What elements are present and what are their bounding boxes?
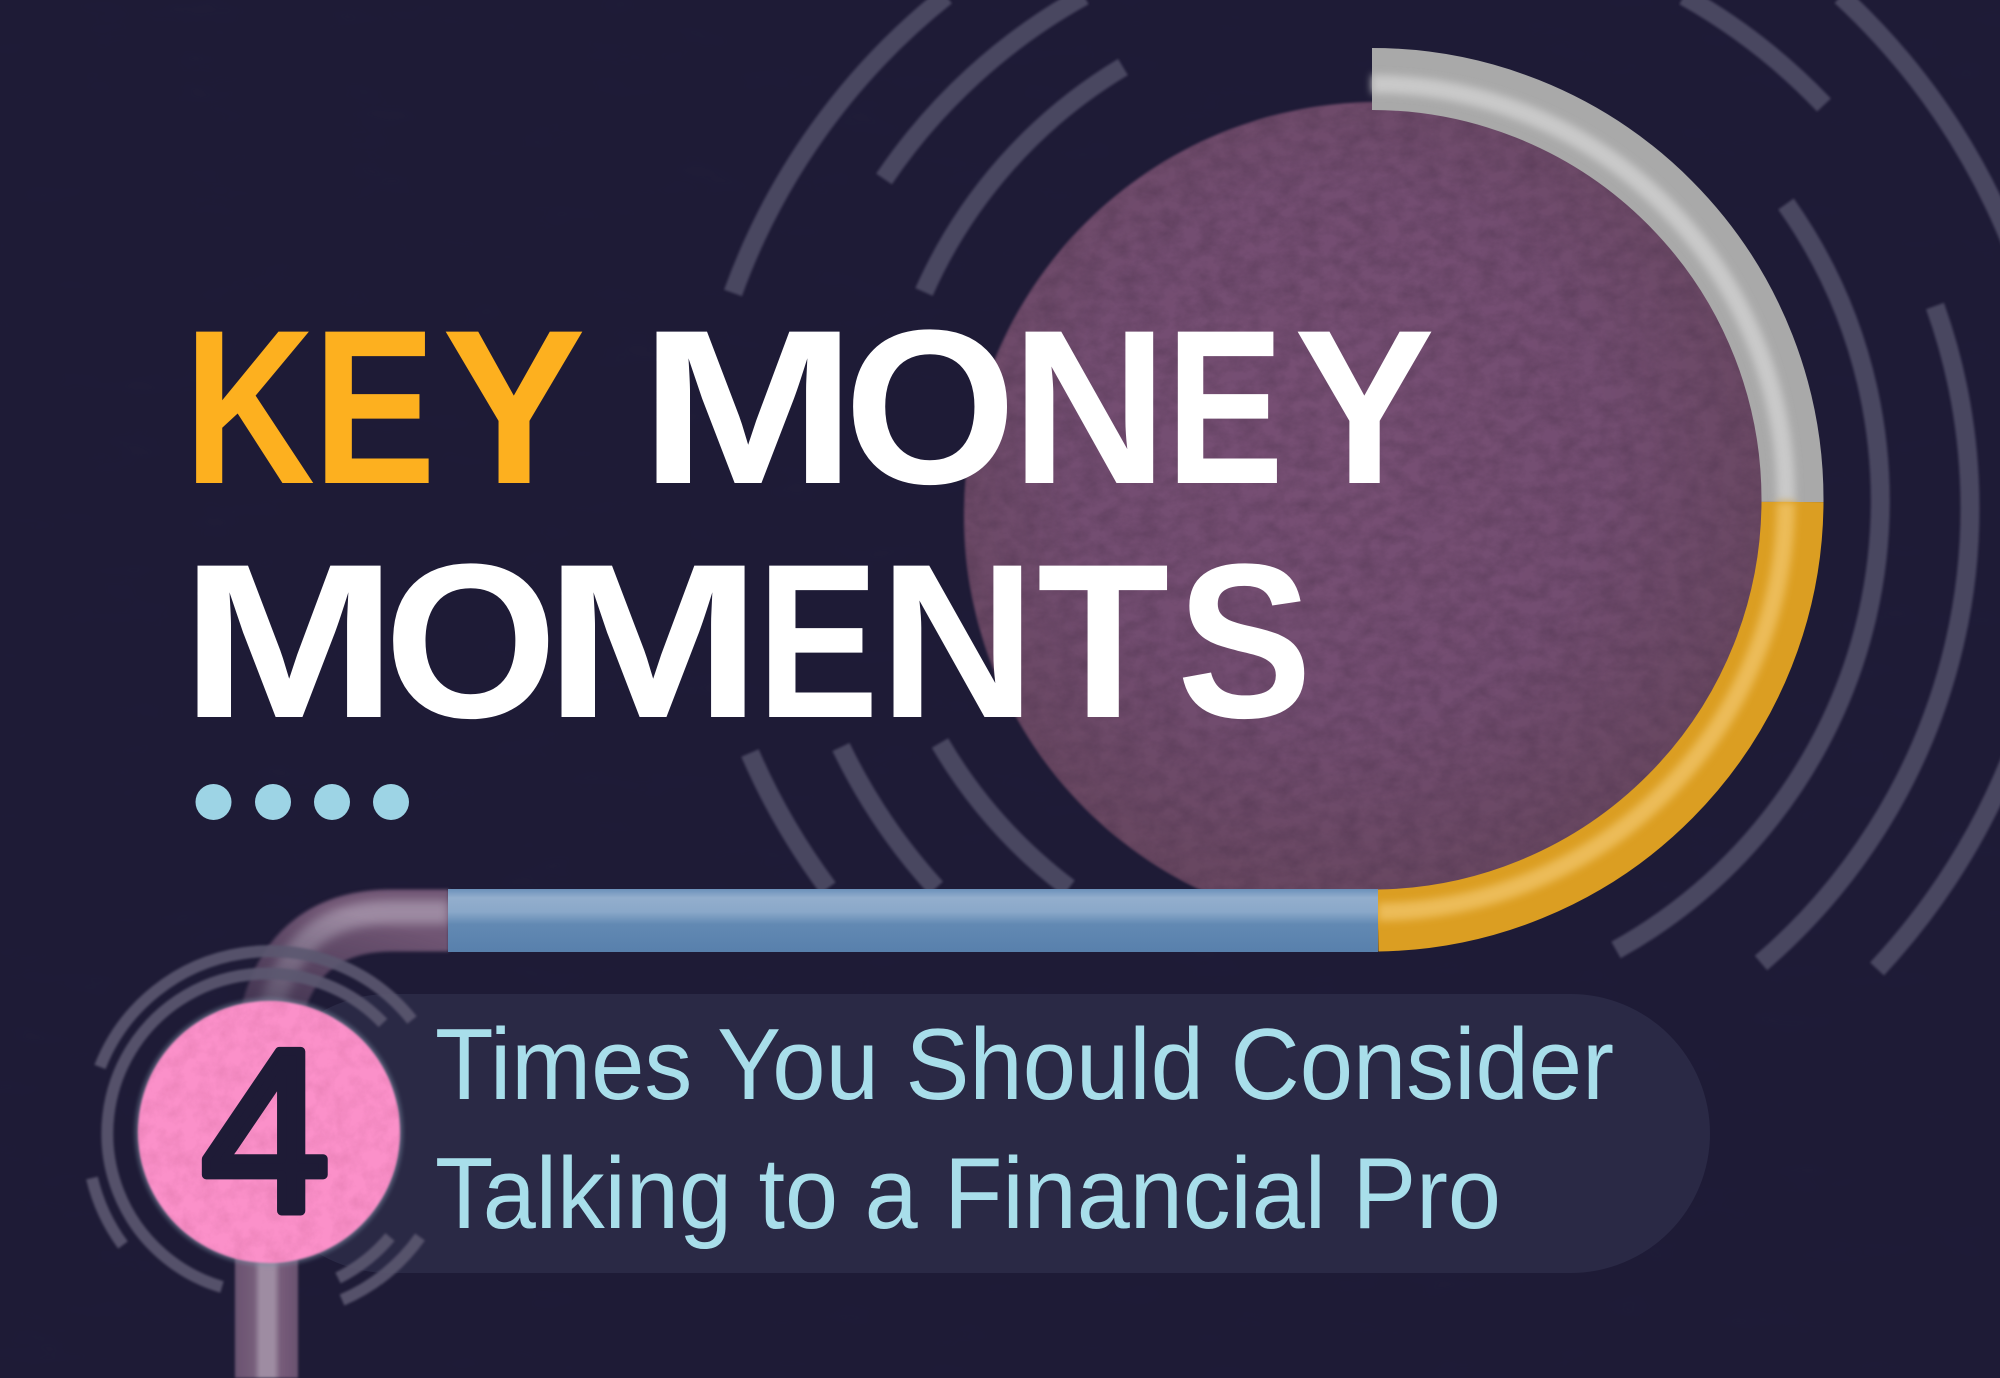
title word: KEY: [184, 284, 586, 530]
pipe: mauve stem: [235, 1250, 298, 1378]
title word: KEY: Y: [442, 284, 586, 530]
pink textured circle: [138, 1001, 400, 1263]
large purple textured circle: [964, 102, 1792, 930]
ring segment: grey: [1372, 79, 1793, 502]
title word: MOMENTS: S: [1177, 518, 1312, 764]
title word: MOMENTS: M: [180, 518, 398, 764]
concentric arcs around large circle: [733, 0, 2000, 969]
title word: MONEY: E: [1166, 284, 1284, 530]
pipe: mauve curve: [270, 912, 449, 1012]
four dots: [196, 784, 409, 820]
title word: MOMENTS: O: [384, 518, 557, 764]
title word: MOMENTS: N: [879, 518, 1036, 764]
title word: MONEY: M: [639, 284, 857, 530]
title: [180, 284, 1435, 764]
title word: MOMENTS: E: [757, 518, 878, 764]
pipe: blue bar: [448, 889, 1378, 952]
title word: MONEY: N: [1011, 284, 1168, 530]
subtitle line 2: Talking to a Financial Pro: [435, 1138, 1501, 1250]
title word: MONEY: [639, 284, 1435, 530]
circle glow: [135, 998, 403, 1266]
subtitle line 1: Times You Should Consider: [435, 1009, 1614, 1121]
progress ring: [1372, 79, 1793, 920]
subtitle pill background: [250, 994, 1710, 1273]
subtitle: [435, 1009, 1614, 1250]
title word: MOMENTS: T: [1037, 518, 1170, 764]
title word: MOMENTS: [180, 518, 1312, 764]
title word: MONEY: O: [844, 284, 1016, 530]
number 4: 4: [201, 1002, 330, 1261]
title word: KEY: E: [313, 284, 436, 530]
title word: MOMENTS: M: [544, 518, 762, 764]
title word: KEY: K: [184, 284, 315, 530]
ring segment: orange: [1378, 502, 1792, 920]
number circle: [135, 998, 403, 1266]
title word: MONEY: Y: [1294, 284, 1435, 530]
small arcs around number circle: [92, 951, 420, 1300]
